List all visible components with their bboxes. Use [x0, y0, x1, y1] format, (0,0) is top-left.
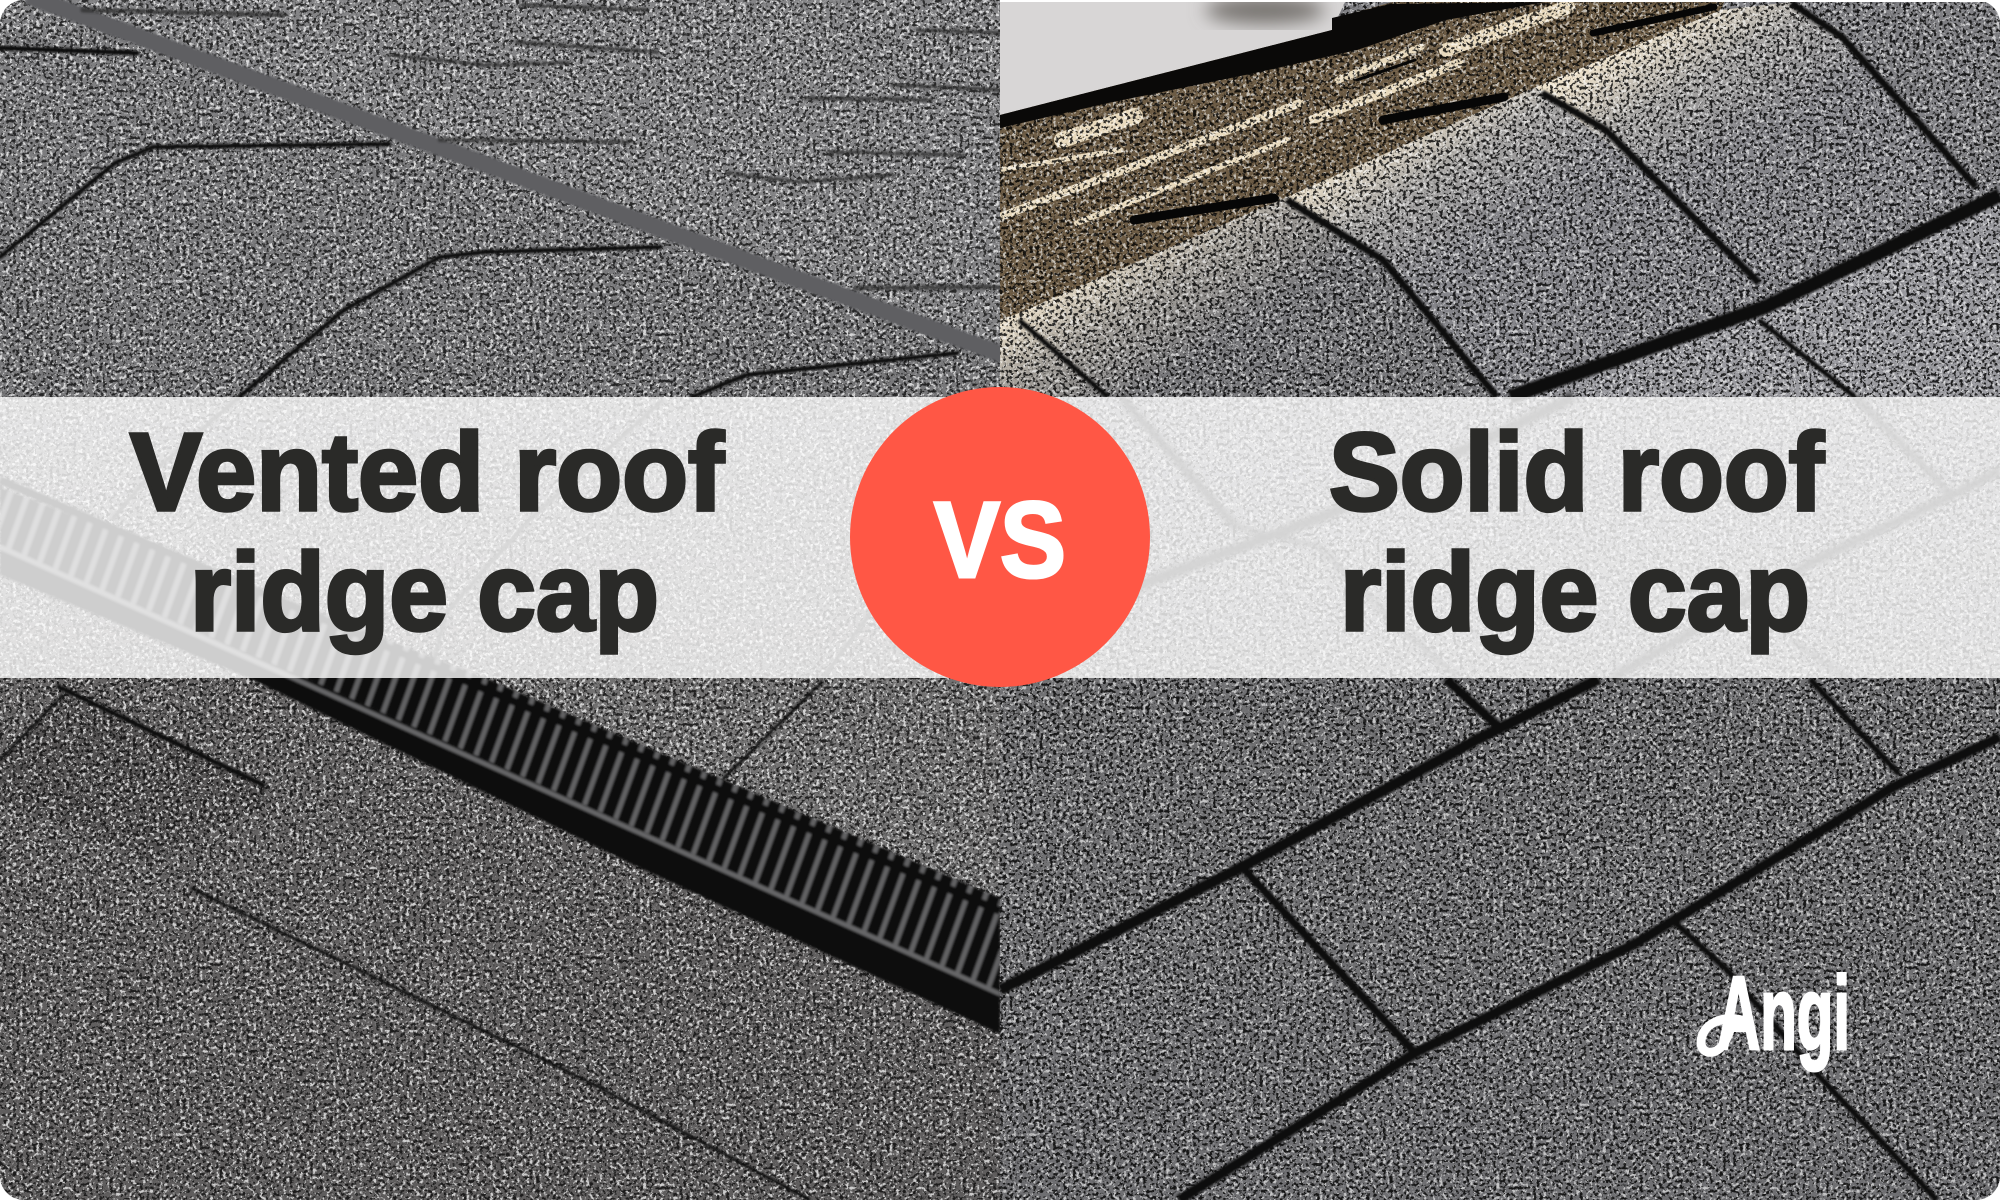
heading: solid roof ridge cap: Solid roof: [1329, 411, 1824, 534]
heading: solid roof ridge cap: ridge cap: [1340, 531, 1810, 654]
vs badge: VS: [934, 479, 1066, 600]
vs badge: [850, 387, 1150, 687]
shingle: lower right, lighter: [1510, 200, 2000, 397]
shingle: left: [1000, 197, 1497, 397]
roof grain texture: [0, 0, 1000, 1200]
lower shingle seams: [0, 681, 823, 1200]
shingle cut lines: [0, 5, 1000, 397]
shaded shingle patch: [0, 694, 265, 860]
ridge line strip: [28, 0, 1004, 355]
black gaps in underlayment: [1134, 7, 1714, 220]
ridge vent with slots: [0, 480, 1000, 1034]
shingle: top right corner: [1791, 2, 2000, 190]
shingle edges hidden under the band: [112, 397, 880, 678]
heading: vented roof ridge cap: Vented roof: [130, 411, 724, 534]
heading: solid roof ridge cap: [1329, 411, 1824, 654]
black roof edge: [1000, 2, 1545, 128]
shingle gap lines under the band: [1000, 397, 2000, 678]
panel: vented roof ridge cap photo: [0, 0, 1004, 1200]
heading: vented roof ridge cap: ridge cap: [190, 531, 659, 654]
shingle gap lines, lower: [1000, 679, 2000, 1200]
shingle gap lines, upper: [1019, 3, 2000, 397]
upper shingle area, hazier tone: [540, 171, 1000, 344]
panel: solid roof ridge cap photo: [1000, 0, 2000, 1200]
tan underlayment: [1000, 0, 1725, 320]
logo: Angi: Angi: [1717, 956, 1850, 1072]
translucent label band: [0, 397, 2000, 678]
shingle: centre: [1287, 87, 1759, 397]
heading: vented roof ridge cap: [130, 411, 724, 654]
roof grain texture: [1000, 0, 2000, 1200]
cream highlights on underlayment: [1000, 7, 1568, 223]
logo: Angi: [1701, 956, 1850, 1072]
shingle area above the vent: [485, 678, 1000, 898]
shingle: right: [1536, 2, 1976, 290]
sky behind the roof: [1000, 2, 1345, 115]
blurred background shape: [1205, 0, 1325, 24]
